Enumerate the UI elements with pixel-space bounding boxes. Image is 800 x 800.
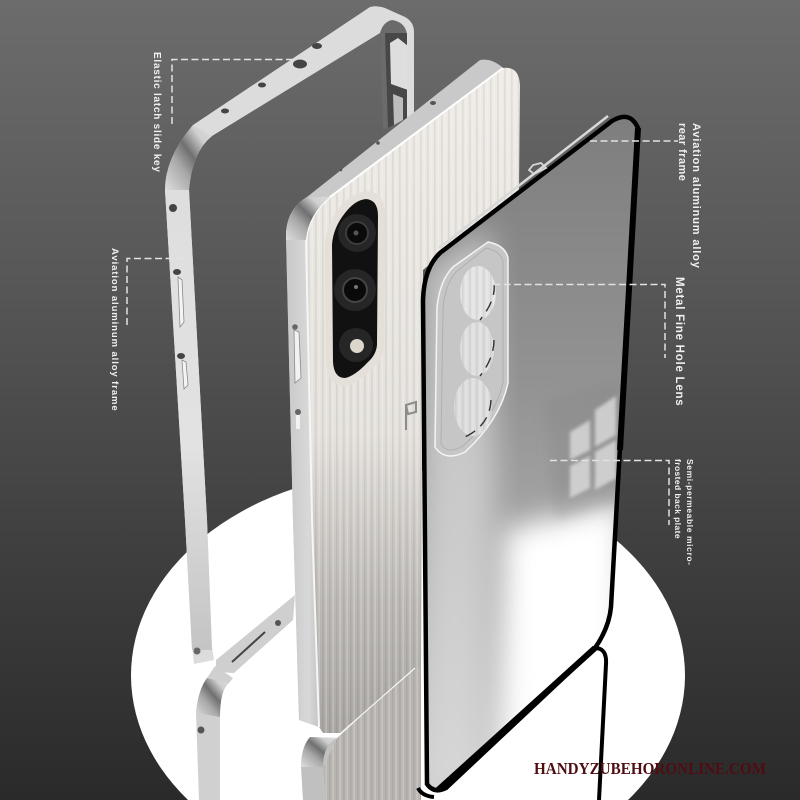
camera module bbox=[325, 191, 385, 386]
white display disc bbox=[131, 470, 685, 800]
callout: elastic latch slide key bbox=[151, 52, 293, 173]
callout: aviation aluminum alloy rear frame: rear frame bbox=[676, 123, 688, 181]
top lens bbox=[338, 214, 376, 252]
callout: aviation aluminum alloy frame bbox=[109, 248, 183, 412]
flash bbox=[339, 328, 373, 362]
small logo mark on phone bbox=[406, 402, 416, 430]
callout: metal fine hole lens bbox=[493, 277, 685, 406]
callout: semi-permeable micro-frosted back plate: Semi-permeable micro- bbox=[685, 459, 695, 566]
metal frame lower corner and slider clip bbox=[194, 595, 295, 800]
metal side frame (left) bbox=[165, 6, 414, 664]
three lens holes bbox=[454, 266, 496, 437]
callout: aviation aluminum alloy frame: Aviation aluminum alloy frame bbox=[109, 248, 120, 412]
callout: metal fine hole lens: Metal Fine Hole Lens bbox=[673, 277, 685, 406]
phone body with ribbed back bbox=[286, 60, 520, 733]
callout: semi-permeable micro-frosted back plate: frosted back plate bbox=[673, 459, 683, 539]
glass plate reflection on disc bbox=[418, 648, 606, 800]
callout: elastic latch slide key: Elastic latch slide key bbox=[151, 52, 162, 173]
callout: aviation aluminum alloy rear frame bbox=[590, 123, 702, 269]
callout: aviation aluminum alloy rear frame: Aviation aluminum alloy bbox=[690, 123, 702, 269]
watermark: HANDYZUBEHORONLINE.COM bbox=[534, 759, 766, 778]
callout: semi-permeable micro-frosted back plate bbox=[550, 459, 695, 566]
middle lens bbox=[334, 269, 376, 311]
small hook at plate edge bbox=[529, 163, 546, 174]
window light reflection bbox=[570, 396, 616, 498]
phone lower reflection bbox=[301, 668, 421, 800]
glass back plate bbox=[423, 116, 638, 800]
metal fine hole lens ring bbox=[435, 242, 508, 456]
